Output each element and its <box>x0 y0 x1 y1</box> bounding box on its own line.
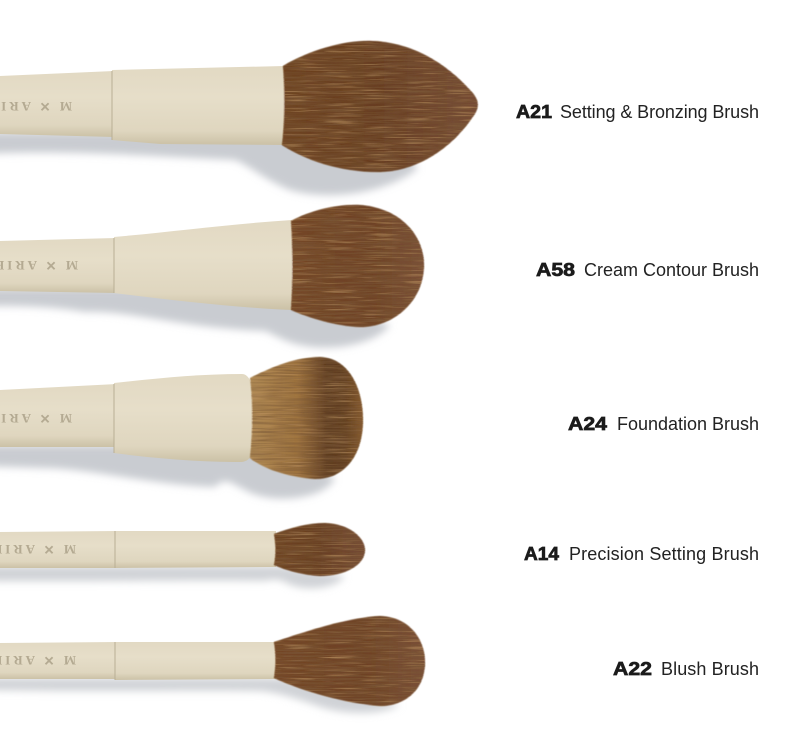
handle <box>0 384 117 447</box>
bristles <box>291 205 424 327</box>
handle <box>0 71 114 137</box>
label: A22 Blush Brush <box>613 659 759 679</box>
label: A58 Cream Contour Brush: A58 <box>536 260 575 280</box>
ferrule <box>115 531 276 568</box>
ferrule <box>112 66 284 145</box>
bristles <box>274 523 365 576</box>
handle <box>0 238 116 293</box>
handle <box>0 531 118 568</box>
shadow <box>0 678 400 713</box>
shadow <box>0 445 335 499</box>
label: A24 Foundation Brush: Foundation Brush <box>617 414 759 434</box>
label: A22 Blush Brush: A22 <box>613 659 652 679</box>
label: A22 Blush Brush: Blush Brush <box>661 659 759 679</box>
label: A58 Cream Contour Brush: Cream Contour Brush <box>584 260 759 280</box>
shadow <box>0 566 345 588</box>
shadow <box>0 288 390 348</box>
brush A22 <box>0 616 425 713</box>
label: A21 Setting & Bronzing Brush: A21 <box>516 102 552 122</box>
brush A58 <box>0 205 424 348</box>
ferrule <box>114 374 252 462</box>
shadow <box>0 132 418 195</box>
label: A21 Setting & Bronzing Brush: Setting & Bronzing Brush <box>560 102 759 122</box>
handle <box>0 642 118 679</box>
ferrule <box>114 220 292 310</box>
ferrule <box>115 642 276 680</box>
brush A24 <box>0 357 363 499</box>
bristles <box>250 357 363 479</box>
label: A24 Foundation Brush: A24 <box>568 414 607 434</box>
label: A14 Precision Setting Brush: Precision Setting Brush <box>569 544 759 564</box>
bristles <box>282 41 478 172</box>
bristles <box>274 616 425 706</box>
label: A14 Precision Setting Brush: A14 <box>524 544 559 564</box>
brush A21 <box>0 41 478 195</box>
brush A14 <box>0 523 365 588</box>
